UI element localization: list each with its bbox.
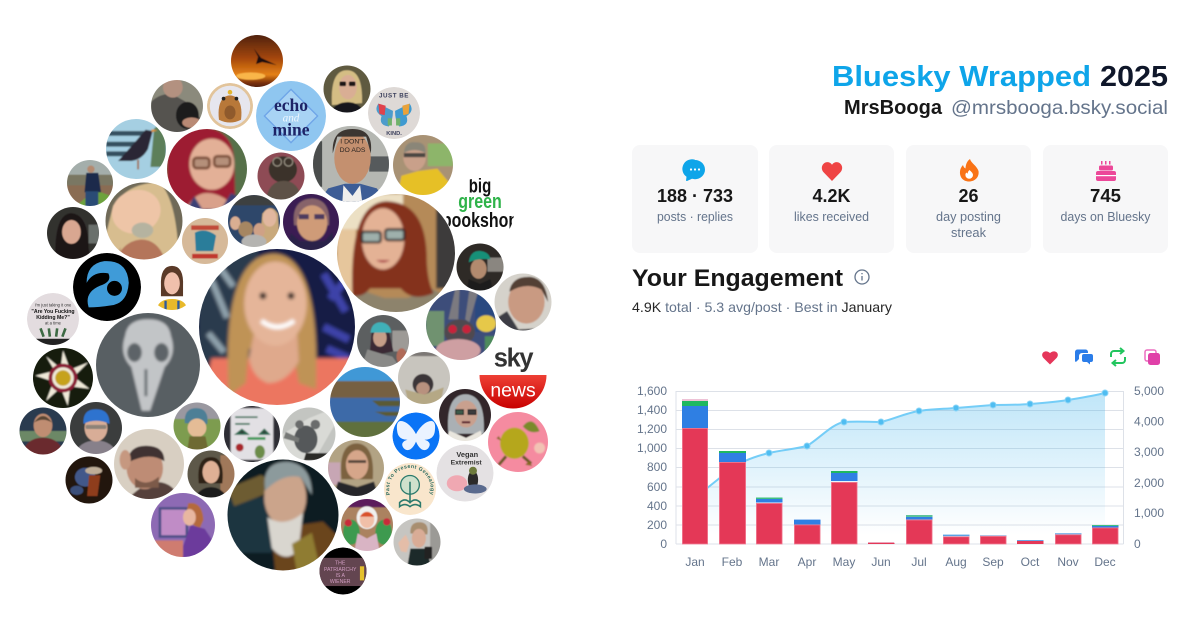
month labels: Sep	[982, 555, 1004, 569]
icon: replies	[1075, 350, 1093, 364]
bars: replies	[682, 406, 1118, 541]
icon: info	[855, 270, 869, 284]
avatar: grey mouse	[277, 402, 341, 466]
avatar: echo and mine: echo	[274, 95, 308, 115]
avatar: pixel art girl	[158, 266, 186, 310]
avatar: sunset bird	[231, 35, 283, 87]
left axis labels: 200	[647, 518, 667, 532]
avatar: sky news logo: news	[490, 379, 536, 401]
avatar: echo and mine	[256, 81, 326, 151]
avatar: echo and mine: mine	[273, 120, 310, 140]
icon: flame	[960, 159, 979, 182]
avatar: young man	[494, 274, 552, 330]
avatar: blackbird on bench	[106, 119, 166, 179]
right axis labels: 0	[1134, 537, 1141, 551]
month labels: Jun	[871, 555, 891, 569]
cumulative line	[695, 393, 1105, 498]
icon: likes	[1042, 351, 1058, 364]
avatar: Are You Kidding Me sign: "Are You Fucking	[31, 309, 75, 315]
avatar: man in green hat	[456, 244, 504, 290]
icon: birthday cake	[1096, 161, 1116, 181]
avatar: pink fruit character	[482, 406, 554, 478]
avatar: big green bookshop logo	[446, 178, 514, 229]
avatar: Vegan Extremist t-shirt: Extremist	[451, 459, 482, 466]
right axis labels: 5,000	[1134, 384, 1164, 398]
display name: MrsBooga	[844, 97, 943, 119]
avatar: Just Be Kind butterfly: JUST BE	[379, 92, 409, 99]
avatar: woman with glasses and toys	[188, 450, 234, 498]
avatar: main profile photo	[199, 249, 355, 405]
value: 26	[958, 185, 978, 206]
bars: likes	[682, 428, 1118, 544]
left axis labels: 1,400	[637, 403, 667, 417]
cumulative area	[695, 393, 1105, 544]
avatar: Vegan Extremist t-shirt	[436, 444, 494, 502]
chart legend	[1042, 348, 1160, 366]
panel: days on Bluesky	[1043, 145, 1168, 253]
label: days on Bluesky	[1060, 210, 1151, 224]
heading: Your Engagement: Your Engagement	[632, 265, 843, 292]
label: day posting	[936, 210, 1001, 224]
month labels: Mar	[759, 555, 779, 569]
right axis labels	[1134, 384, 1164, 551]
month labels: Oct	[1021, 555, 1040, 569]
avatar: man in plaid	[20, 408, 66, 454]
left axis labels: 0	[660, 537, 667, 551]
bars: reposts	[682, 401, 1118, 526]
avatar: Just Be Kind butterfly: KIND.	[386, 131, 402, 137]
avatar: man selfie	[114, 429, 184, 499]
avatar: The Patriarchy is a Wiener chalkboard: IS A	[335, 573, 345, 579]
avatar: Labyrinth puppet	[66, 456, 112, 504]
avatar: Bluesky butterfly logo	[392, 412, 440, 460]
avatar: cat with flying goggles	[258, 152, 304, 200]
month labels: Aug	[945, 555, 967, 569]
month labels: Jan	[685, 555, 705, 569]
avatar: Are You Kidding Me sign	[27, 293, 79, 346]
avatar: sky news logo	[480, 342, 546, 408]
avatar: lake landscape	[323, 360, 407, 445]
avatar: bird skull drawing	[96, 313, 200, 417]
panel: posts and replies	[632, 145, 758, 253]
avatar: anime woman in purple	[151, 493, 215, 557]
left axis labels	[637, 384, 667, 551]
avatar: Vegan Extremist t-shirt: Vegan	[456, 450, 479, 459]
title: Bluesky Wrapped: Bluesky Wrapped	[832, 61, 1091, 93]
panel: day posting streak	[906, 145, 1031, 253]
avatar: Windsor badge	[182, 218, 228, 264]
avatar: woman with grey hair and glasses	[434, 384, 496, 446]
avatar: woman with glasses, purple tint	[283, 194, 339, 250]
avatar: man at lake	[67, 160, 113, 206]
avatar: bearded man in costume	[228, 460, 338, 570]
value: 188 · 733	[657, 185, 733, 206]
avatar: Just Be Kind butterfly	[368, 87, 420, 139]
month labels	[685, 555, 1116, 569]
left axis labels: 600	[647, 480, 667, 494]
label second line: streak	[951, 226, 987, 240]
month labels: Feb	[722, 555, 743, 569]
value: 4.2K	[812, 185, 851, 206]
avatar: echo and mine: and	[283, 113, 300, 125]
icon: quotes	[1145, 350, 1160, 365]
value: 745	[1090, 185, 1121, 206]
avatar: gazania flower	[33, 348, 93, 408]
avatar: Are You Kidding Me sign: Kidding Me?"	[36, 315, 70, 321]
right axis labels: 2,000	[1134, 476, 1164, 490]
title: year 2025: 2025	[1100, 61, 1168, 93]
avatar: black swirl logo	[73, 253, 141, 321]
month labels: May	[833, 555, 855, 569]
avatar: man with "I don't do ads" forehead: I DON'T	[340, 138, 366, 145]
avatar: red-haired woman with glasses	[167, 129, 247, 209]
avatar: woman in beanie	[357, 315, 409, 367]
handle: @mrsbooga.bsky.social	[951, 97, 1168, 119]
month labels: Nov	[1057, 555, 1079, 569]
engagement summary: 4.9K total · 5.3 avg/post · Best in January	[632, 299, 892, 315]
avatar: man in blue cap	[70, 402, 122, 454]
avatar: red-haired illustrated woman with strawberries	[336, 494, 398, 559]
right axis labels: 4,000	[1134, 414, 1164, 428]
left axis labels: 400	[647, 499, 667, 513]
panel: likes received	[769, 145, 894, 253]
avatar: man with cat	[151, 80, 203, 132]
icon: chat bubble	[682, 159, 705, 181]
avatar: dark-haired woman	[47, 207, 99, 259]
avatar: big green bookshop logo: green	[458, 191, 502, 213]
left axis labels: 1,000	[637, 441, 667, 455]
avatar: woman reading	[398, 352, 450, 404]
right axis labels: 1,000	[1134, 506, 1164, 520]
avatar cluster	[20, 35, 552, 594]
bars: quotes	[682, 399, 894, 543]
avatar: stitched sign	[224, 406, 280, 462]
avatar: The Patriarchy is a Wiener chalkboard	[320, 548, 366, 594]
avatar: moth rabbit tapestry	[426, 290, 496, 360]
month labels: Dec	[1094, 555, 1116, 569]
left axis labels: 1,600	[637, 384, 667, 398]
avatar: Past to Present Genealogy badge	[384, 463, 436, 515]
avatar: man in yellow shirt	[393, 135, 453, 195]
avatar: man with "I don't do ads" forehead	[313, 126, 389, 202]
icon: heart	[822, 162, 842, 181]
avatar: woman making peace sign	[389, 514, 445, 570]
label: posts · replies	[657, 210, 733, 224]
label: likes received	[794, 210, 869, 224]
header title	[832, 61, 1168, 119]
avatar: Are You Kidding Me sign: at a time	[45, 321, 62, 326]
right axis labels: 3,000	[1134, 445, 1164, 459]
avatar: Are You Kidding Me sign: I'm just taking it one	[35, 303, 72, 308]
avatar: blue-haired doll	[174, 402, 220, 450]
month labels: Apr	[798, 555, 816, 569]
avatar: capybara cross-stitch	[207, 83, 253, 129]
month labels: Jul	[911, 555, 927, 569]
left axis labels: 1,200	[637, 422, 667, 436]
avatar: The Patriarchy is a Wiener chalkboard: PATRIARCHY	[324, 567, 357, 573]
line markers	[766, 390, 1108, 456]
avatar: The Patriarchy is a Wiener chalkboard: THE	[335, 560, 346, 566]
avatar: big green bookshop logo: bookshop	[442, 210, 518, 232]
avatar: Past to Present Genealogy badge: Past To Present Genealogy	[386, 465, 434, 496]
avatar: big green bookshop logo: big	[469, 175, 491, 197]
left axis labels: 800	[647, 460, 667, 474]
avatar: red-haired woman close-up	[337, 194, 455, 312]
avatar: blonde woman	[106, 182, 182, 260]
avatar: The Patriarchy is a Wiener chalkboard: WIENER	[330, 579, 351, 585]
icon: reposts	[1111, 348, 1125, 366]
avatar: smiling woman in fleece	[322, 434, 390, 502]
avatar: man with "I don't do ads" forehead: DO ADS	[340, 147, 366, 154]
avatar: sky news logo: sky	[494, 344, 534, 372]
grid lines	[676, 391, 1124, 544]
avatar: family with dogs	[228, 195, 280, 247]
chart: monthly engagement stacked bars with cumulative line	[637, 384, 1164, 569]
avatar: blonde woman with sunglasses	[324, 66, 370, 112]
